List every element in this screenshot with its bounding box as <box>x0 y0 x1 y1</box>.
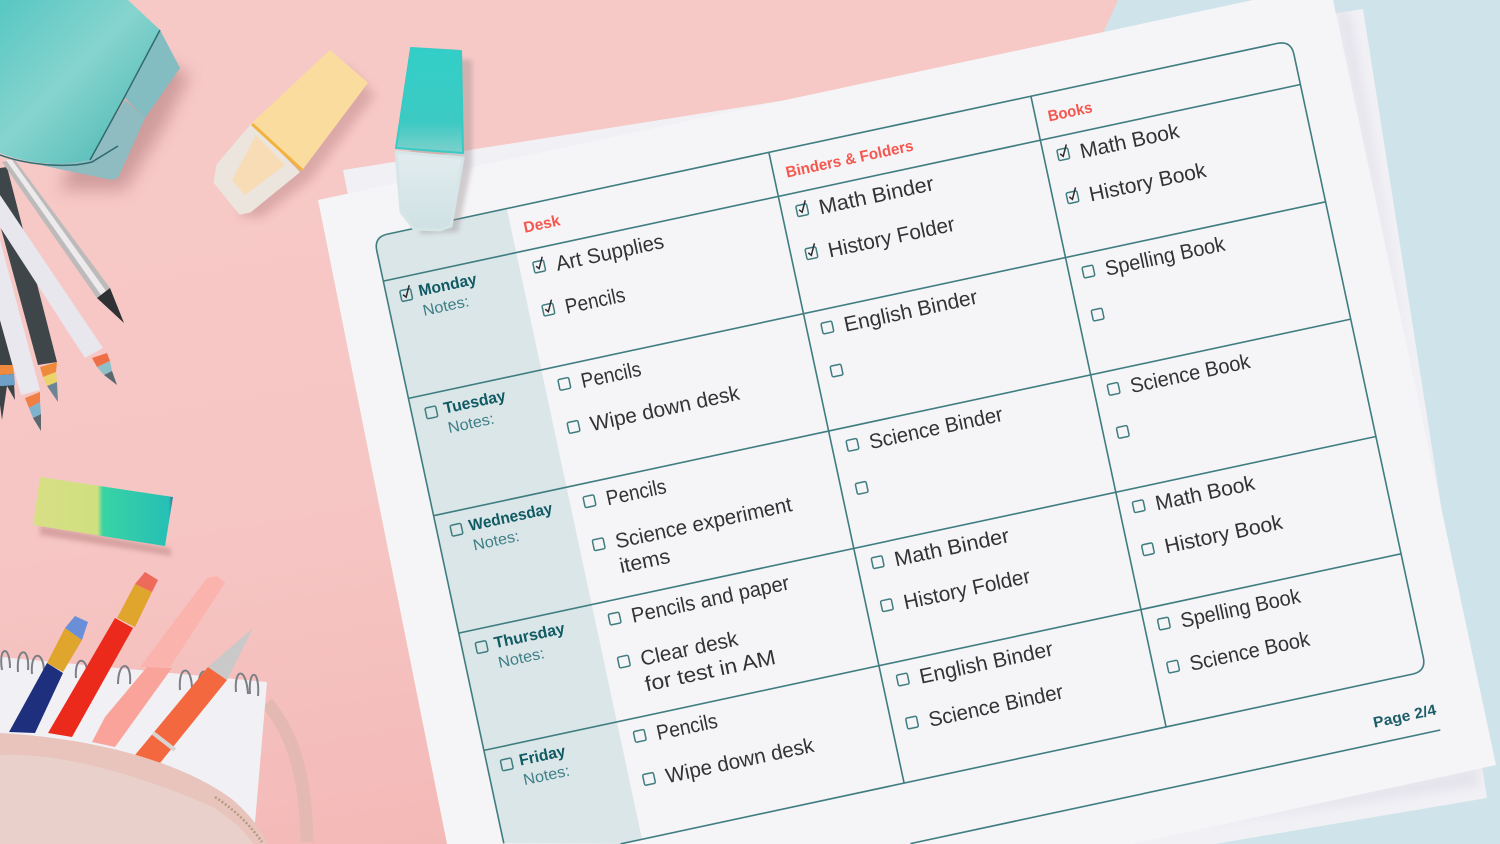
item: Clear desk for test in AM: for test in AM <box>643 646 778 696</box>
item: History Folder: History Folder <box>826 213 957 262</box>
day: Friday: Notes: <box>522 763 571 789</box>
item: Science Binder: Science Binder <box>867 403 1005 454</box>
item: empty checkbox <box>1091 308 1104 321</box>
item: Science Book: Science Book <box>1188 628 1312 676</box>
highlighter cap <box>396 48 463 153</box>
day: Monday: Monday <box>417 271 478 300</box>
pouch seam <box>0 30 160 165</box>
pouch shadow <box>60 60 190 190</box>
item: Pencils: Pencils <box>604 475 668 510</box>
photo: yellow highlighter <box>215 52 375 218</box>
eraser body <box>33 477 173 546</box>
highlighter cap <box>254 52 366 168</box>
column heading: Desk: Desk <box>522 212 562 237</box>
item: English Binder: English Binder <box>842 286 980 337</box>
item: Science experiment items <box>591 493 799 583</box>
day: Monday <box>399 271 483 324</box>
item: Pencils <box>557 358 643 398</box>
highlighter clear tip <box>215 125 298 213</box>
column heading: Books: Books <box>1046 99 1094 125</box>
pencil: silver <box>2 160 124 323</box>
highlighter band <box>252 124 302 170</box>
page number: Page 2/4 <box>1372 701 1438 732</box>
item: empty checkbox <box>855 481 868 494</box>
footer rule <box>910 730 1440 844</box>
pencil: dark <box>0 167 58 402</box>
day: Tuesday: Tuesday <box>442 388 507 418</box>
day: Thursday: Thursday <box>492 620 567 652</box>
eraser shadow <box>40 525 172 556</box>
day: Monday: Notes: <box>421 293 471 320</box>
item: Art Supplies: Art Supplies <box>554 230 666 276</box>
highlighter shadow <box>410 55 472 234</box>
notepad <box>0 657 267 823</box>
day: Wednesday <box>449 500 558 558</box>
item: empty checkbox <box>830 364 843 377</box>
pouch body <box>0 0 160 164</box>
item: empty checkbox <box>1116 425 1129 438</box>
item: Spelling Book: Spelling Book <box>1178 585 1303 633</box>
photo: two-tone eraser <box>33 477 173 556</box>
leather bag <box>0 733 267 844</box>
item: Math Binder: Math Binder <box>892 524 1011 571</box>
photo: teal pencil pouch with pencils <box>0 0 190 431</box>
photo: pink bag with notepad and pens <box>0 572 307 844</box>
table rows and columns <box>383 84 1401 783</box>
bag strap <box>267 703 307 842</box>
item: Science experiment items: items <box>617 545 672 578</box>
day: Thursday <box>474 620 571 676</box>
item: Pencils: Pencils <box>579 358 643 393</box>
item: Pencils: Pencils <box>563 283 627 319</box>
pink translucent pen <box>92 576 225 747</box>
item: Math Binder: Math Binder <box>817 172 936 219</box>
day: Tuesday <box>424 388 512 441</box>
item: Clear desk for test in AM <box>616 621 778 701</box>
item: Clear desk for test in AM: Clear desk <box>638 627 740 671</box>
item: Wipe down desk: Wipe down desk <box>664 734 816 788</box>
item: Math Book: Math Book <box>1078 120 1182 163</box>
orange pen <box>135 628 253 763</box>
shadow of front sheet <box>1200 5 1490 825</box>
item: History Book: History Book <box>1162 511 1285 558</box>
table outline <box>376 43 1424 844</box>
highlighter clear tip <box>396 152 463 230</box>
pouch side <box>125 30 180 118</box>
item: English Binder: English Binder <box>917 638 1055 689</box>
item: Pencils and paper: Pencils and paper <box>629 571 791 628</box>
pouch underside <box>40 100 145 180</box>
item: Pencils <box>582 475 668 515</box>
day column tint <box>376 209 642 844</box>
checklist table <box>376 43 1440 844</box>
item: Spelling Book: Spelling Book <box>1103 233 1228 281</box>
photo: teal highlighter <box>396 48 472 234</box>
item: Pencils <box>632 710 720 750</box>
notepad spiral rings <box>1 651 258 696</box>
day: Friday: Friday <box>518 743 567 770</box>
column heading: Binders & Folders: Binders & Folders <box>784 138 915 182</box>
item: Math Book: Math Book <box>1153 472 1257 515</box>
day: Wednesday: Notes: <box>472 528 521 554</box>
item: Science experiment items: Science experiment <box>613 493 794 553</box>
bag zipper <box>215 797 262 842</box>
day: Friday <box>500 743 571 793</box>
front sheet of paper <box>318 0 1496 844</box>
back sheet of paper <box>343 9 1487 844</box>
item: Science Binder: Science Binder <box>927 680 1065 732</box>
background: blue paper <box>1100 0 1500 844</box>
highlighter ink core <box>232 135 285 195</box>
red pencil <box>48 572 158 737</box>
item: Wipe down desk: Wipe down desk <box>588 382 742 436</box>
item: Pencils: Pencils <box>654 710 720 745</box>
day: Tuesday: Notes: <box>446 411 496 437</box>
item: History Folder: History Folder <box>901 565 1032 614</box>
pencil: white lower <box>0 240 41 431</box>
item: Science Book: Science Book <box>1128 350 1253 398</box>
day: Wednesday: Wednesday <box>467 500 554 535</box>
pencil: white upper <box>0 195 117 385</box>
bag body <box>0 755 253 844</box>
day: Thursday: Notes: <box>497 645 546 672</box>
pencil: dark rainbow <box>0 320 15 420</box>
blue pencil <box>9 616 88 733</box>
item: History Book: History Book <box>1087 159 1209 206</box>
item: Pencils <box>541 283 627 323</box>
highlighter shadow <box>240 65 375 218</box>
